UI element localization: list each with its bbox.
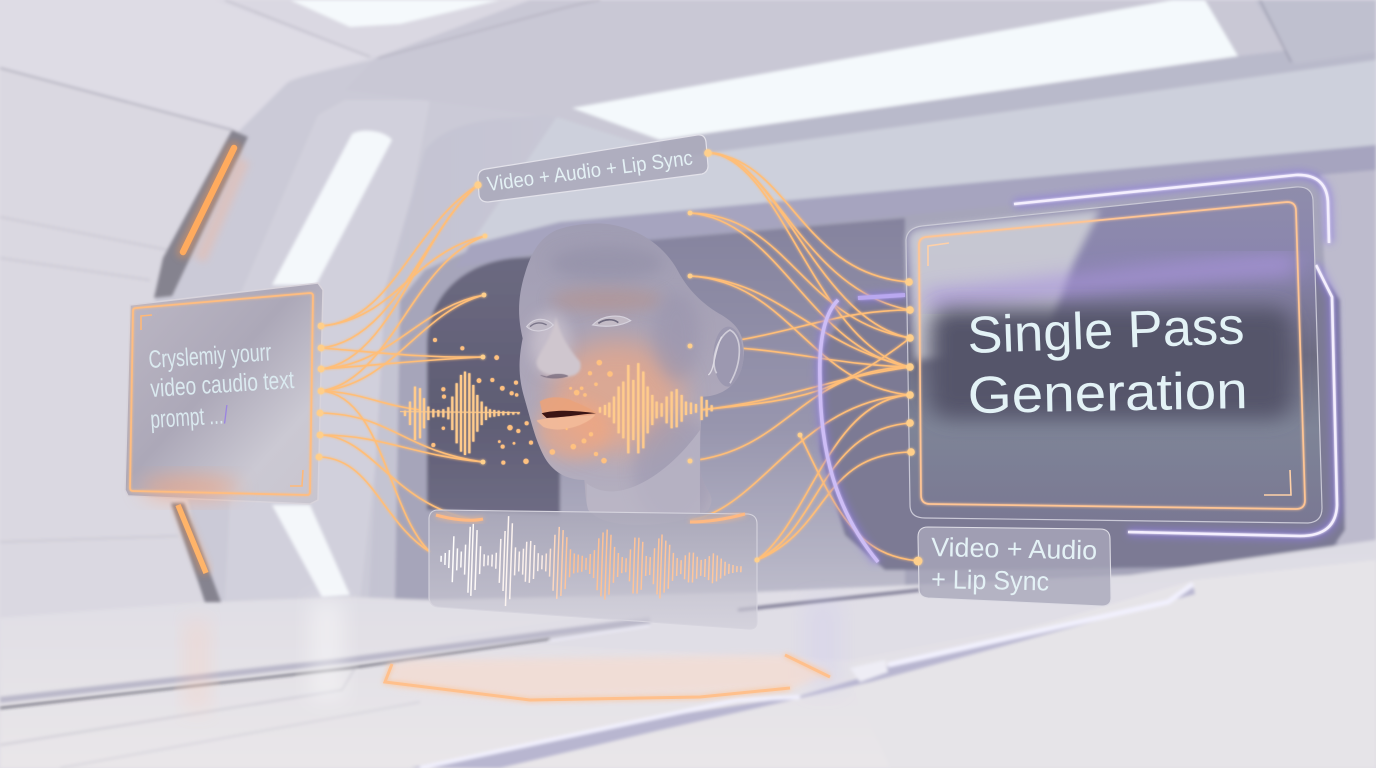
prompt text [146, 337, 297, 434]
label: video audio lip sync (output): + Lip Sync [931, 564, 1049, 596]
left particle waveform [400, 372, 520, 455]
glass panel [906, 187, 1322, 523]
purple neon frame [820, 175, 1337, 562]
title: Single Pass [966, 297, 1245, 365]
nose [537, 317, 581, 378]
label: video audio lip sync (output): Video + Audio [931, 532, 1097, 565]
right waveform over mouth [600, 363, 712, 453]
panel border [130, 293, 313, 495]
ceiling light panels [272, 0, 1238, 597]
line end nodes around head [481, 211, 802, 464]
audio particles [431, 338, 613, 465]
panel: text prompt [125, 283, 324, 504]
label: video audio lip sync (output) [914, 527, 1111, 606]
mouth [537, 397, 597, 429]
input nodes [905, 278, 915, 456]
eyes [527, 316, 631, 331]
prompt text: video caudio text [150, 366, 295, 403]
prompt text: Cryslemiy yourr [148, 338, 272, 374]
label: video audio lip sync (top): Video + Audio + Lip Sync [486, 146, 694, 196]
output nodes [316, 323, 324, 460]
back wall band [395, 168, 1376, 600]
title: Generation [967, 362, 1248, 425]
inner bulkhead [360, 60, 1376, 768]
floor glow platform [385, 655, 830, 700]
title [966, 297, 1248, 425]
corner brackets [141, 315, 303, 486]
3D head [519, 223, 744, 527]
corner brackets [928, 243, 1291, 495]
panel: audio waveform [429, 510, 760, 629]
panel border [919, 202, 1305, 509]
wall orange light strips [154, 130, 248, 602]
floor [0, 540, 1376, 768]
signal lines connecting panels [321, 153, 918, 561]
waveform bars [440, 514, 742, 614]
dark tunnel [560, 218, 905, 600]
right chamber box behind panel [820, 265, 1345, 570]
prompt text: prompt .../ [149, 401, 229, 434]
panel: single pass generation [820, 175, 1337, 562]
floor details [0, 582, 1195, 768]
